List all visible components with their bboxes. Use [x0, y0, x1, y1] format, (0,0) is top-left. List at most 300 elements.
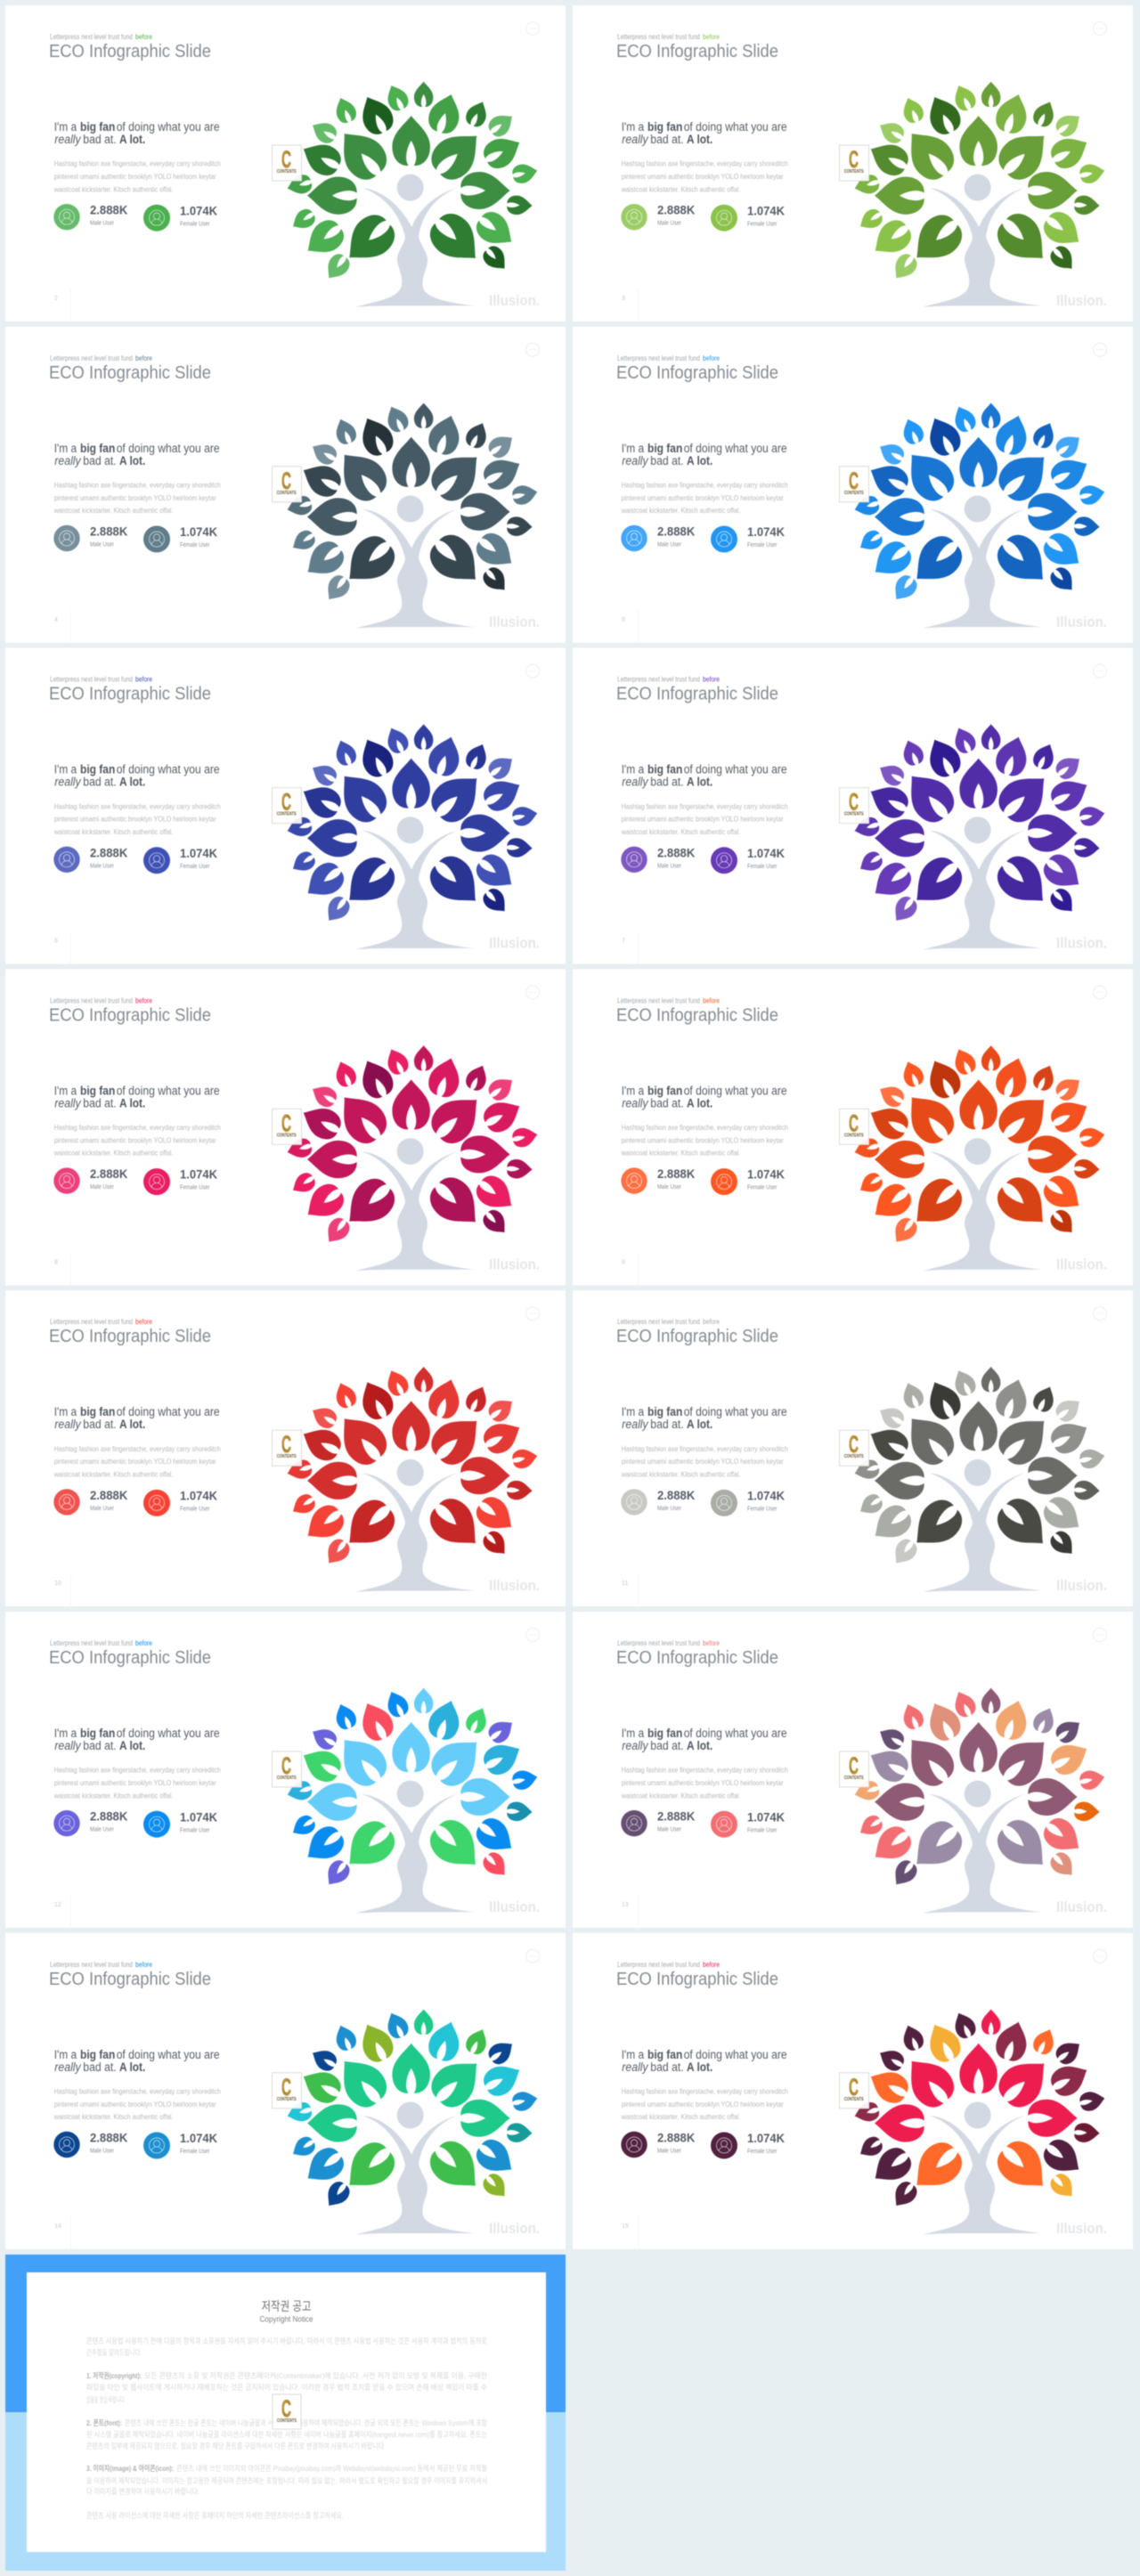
stat: male — [90, 1166, 127, 1190]
panel — [5, 969, 566, 1285]
brand: Illusion. — [489, 2220, 540, 2237]
quote: A lot. — [119, 1096, 145, 1109]
page number — [54, 611, 71, 643]
quote: bad at. — [650, 1096, 684, 1109]
quote: A lot. — [119, 1418, 145, 1431]
section 1: 모든 콘텐츠의 소유 및 저작권은 콘텐츠메이커(Contentmaker)에 있습니다. 사전 허가 없이 모방 및 복제를 이용, 구매한 — [144, 2371, 487, 2380]
slide 10: red — [5, 1290, 566, 1606]
page number — [622, 1253, 638, 1285]
body text — [53, 802, 221, 836]
icon: male user — [621, 1489, 647, 1516]
icon: menu — [525, 1628, 540, 1642]
eyebrow: Letterpress next level trust fund — [617, 1961, 700, 1969]
body text: waistcoat kickstarter. Kitsch authentic offal. — [621, 507, 740, 515]
badge — [273, 2394, 301, 2429]
badge: C — [849, 146, 859, 173]
eyebrow: Letterpress next level trust fund — [50, 676, 133, 684]
quote: really — [54, 454, 82, 467]
icon: menu — [1094, 664, 1106, 678]
stat: female: Female User — [747, 542, 778, 549]
badge — [273, 467, 301, 502]
quote — [54, 763, 220, 789]
brand: Illusion. — [489, 1255, 540, 1272]
quote — [622, 2048, 787, 2074]
stat: female — [747, 1167, 785, 1191]
tree — [285, 402, 539, 628]
stat: female: Female User — [747, 2149, 778, 2155]
eyebrow accent: before — [703, 1961, 720, 1969]
badge: C — [281, 789, 291, 816]
stat: male — [90, 1809, 127, 1833]
quote: bad at. — [83, 454, 117, 467]
quote: A lot. — [119, 1739, 145, 1752]
quote: I'm a — [622, 763, 645, 776]
stat: female: Female User — [747, 864, 778, 870]
badge: C — [849, 1752, 859, 1779]
stat: male: Male User — [657, 221, 682, 227]
body text: Hashtag fashion axe fingerstache, everyday carry shoreditch — [622, 1124, 788, 1132]
eyebrow: Letterpress next level trust fund — [617, 996, 700, 1004]
quote: A lot. — [687, 2060, 712, 2074]
body text — [621, 160, 788, 193]
badge: CONTENTS — [277, 2097, 297, 2102]
brand: Illusion. — [1056, 1255, 1107, 1272]
title: ECO Infographic Slide — [616, 1327, 778, 1346]
icon: female user — [711, 847, 737, 874]
title: ECO Infographic Slide — [616, 1005, 778, 1025]
stat: male: Male User — [90, 541, 115, 548]
page number: 2 — [54, 296, 58, 302]
eyebrow: Letterpress next level trust fund — [617, 1639, 700, 1647]
intro paragraph: 간주함을 알려드립니다. — [86, 2348, 142, 2357]
stat: male: Male User — [657, 2149, 682, 2155]
quote — [54, 1084, 220, 1109]
stat: female: Female User — [180, 221, 210, 227]
intro paragraph — [86, 2336, 487, 2357]
icon: female user — [711, 1490, 737, 1516]
slide 6: indigo — [5, 648, 566, 964]
body text — [621, 1767, 788, 1800]
body text: pinterest umami authentic brooklyn YOLO heirloom keytar — [622, 1136, 784, 1144]
stat: female — [180, 203, 217, 227]
quote: big fan — [647, 442, 682, 455]
icon: menu — [525, 1949, 540, 1962]
eyebrow: Letterpress next level trust fund — [617, 33, 700, 41]
quote: big fan — [647, 2048, 682, 2061]
stat: male — [657, 2130, 695, 2155]
stat: female: Female User — [747, 221, 778, 227]
eyebrow: Letterpress next level trust fund — [617, 1318, 700, 1326]
slide 13: mauve multicolour — [573, 1612, 1133, 1928]
badge — [273, 1751, 301, 1787]
page number: 11 — [622, 1581, 628, 1587]
icon: male user — [53, 204, 80, 230]
quote — [622, 120, 787, 146]
stat: female — [747, 1489, 785, 1512]
panel — [5, 327, 566, 643]
body text: Hashtag fashion axe fingerstache, everyday carry shoreditch — [622, 160, 788, 168]
stat: female: 1.074K — [180, 203, 217, 217]
icon: menu — [525, 664, 540, 678]
eyebrow: Letterpress next level trust fund — [50, 1961, 133, 1969]
quote: bad at. — [650, 1739, 684, 1752]
stat: male: Male User — [90, 863, 115, 869]
quote: bad at. — [83, 1418, 117, 1431]
quote: I'm a — [54, 763, 77, 776]
body text: Hashtag fashion axe fingerstache, everyday carry shoreditch — [54, 1767, 221, 1775]
badge — [839, 467, 869, 502]
stat: male: 2.888K — [657, 2131, 695, 2145]
page number — [54, 932, 71, 964]
brand: Illusion. — [1056, 292, 1107, 309]
slide 8: pink — [5, 969, 566, 1285]
quote — [54, 1727, 220, 1752]
tree — [285, 724, 539, 949]
body text — [621, 481, 788, 515]
body text: Hashtag fashion axe fingerstache, everyday carry shoreditch — [622, 1767, 788, 1775]
eyebrow: Letterpress next level trust fund — [50, 33, 133, 41]
stat: male: 2.888K — [657, 845, 695, 859]
body text — [53, 1124, 221, 1158]
quote: big fan — [647, 1405, 682, 1418]
slide 11: grey — [573, 1290, 1133, 1606]
stat: female: Female User — [180, 1827, 210, 1833]
icon: male user — [621, 1167, 647, 1194]
stat: male: Male User — [90, 221, 115, 227]
stat: female: Female User — [180, 864, 210, 870]
title: ECO Infographic Slide — [49, 685, 211, 704]
brand: Illusion. — [1056, 614, 1107, 630]
body text: pinterest umami authentic brooklyn YOLO heirloom keytar — [54, 1458, 216, 1466]
slide 9: orange — [573, 969, 1133, 1285]
stat: male: 2.888K — [657, 1166, 695, 1181]
title: ECO Infographic Slide — [49, 1648, 211, 1668]
section 1: 파일을 타인 및 웹사이트에 게시하거나 재배포하는 것은 금지되어 있습니다. 이러한 경우 법적 조치를 받을 수 있으며 손해 배상 책임이 따를 수 — [86, 2383, 487, 2392]
quote: really — [622, 776, 649, 789]
section 2: 콘텐츠 내에 쓰인 폰트는 한글 폰트는 네이버 나눔글꼴과 서울서체를 사용하여 제작되었습니다. 한글 외의 모든 폰트는 Windows System에 포함 — [125, 2418, 487, 2427]
slide 14: teal multicolour — [5, 1933, 566, 2249]
panel — [573, 969, 1133, 1285]
quote: of doing what you are — [684, 120, 787, 134]
quote: of doing what you are — [684, 1084, 787, 1097]
badge: C — [281, 467, 291, 494]
stat: female — [180, 2131, 217, 2155]
body text: waistcoat kickstarter. Kitsch authentic offal. — [621, 2113, 740, 2121]
section 1: 있음을 명심 바랍니다. — [86, 2395, 126, 2404]
eyebrow: Letterpress next level trust fund — [617, 676, 700, 684]
body text: waistcoat kickstarter. Kitsch authentic offal. — [53, 1150, 173, 1158]
stat: female: Female User — [180, 542, 210, 549]
quote: of doing what you are — [117, 1405, 220, 1418]
body text: pinterest umami authentic brooklyn YOLO heirloom keytar — [622, 2101, 784, 2109]
stat: male: Male User — [657, 1827, 682, 1833]
stat: male: 2.888K — [90, 1166, 127, 1181]
quote: of doing what you are — [117, 1084, 220, 1097]
page number: 3 — [622, 296, 625, 302]
badge: CONTENTS — [844, 1776, 864, 1781]
stat: male: Male User — [657, 1184, 682, 1190]
tree — [285, 1687, 539, 1914]
panel — [573, 1933, 1133, 2249]
eyebrow accent: before — [703, 1318, 720, 1326]
body text: pinterest umami authentic brooklyn YOLO heirloom keytar — [622, 1779, 784, 1787]
slide 2: green — [5, 5, 566, 321]
title: ECO Infographic Slide — [616, 1970, 778, 1989]
tree — [852, 2009, 1106, 2234]
page number: 6 — [54, 939, 58, 945]
quote: really — [54, 1739, 82, 1752]
stat: female: Female User — [180, 1185, 210, 1191]
body text: Hashtag fashion axe fingerstache, everyday carry shoreditch — [622, 481, 788, 489]
brand: Illusion. — [1056, 2220, 1107, 2237]
quote — [622, 763, 787, 789]
quote: bad at. — [650, 2060, 684, 2074]
stat: male — [90, 845, 127, 869]
slide 12: sky multicolour — [5, 1612, 566, 1928]
stat: male — [657, 1166, 695, 1190]
badge — [839, 1430, 869, 1466]
icon: menu — [525, 986, 540, 999]
tree — [285, 1367, 539, 1592]
stat: male: 2.888K — [90, 524, 127, 538]
section 3: 콘텐츠 내에 쓰인 이미지와 아이콘은 Pixabay(pixabay.com)와 Webdaysi(webdaysi.com) 등에서 제공된 무료 저작물 — [176, 2464, 487, 2473]
badge — [273, 1430, 301, 1466]
body text: waistcoat kickstarter. Kitsch authentic offal. — [621, 1470, 740, 1478]
section 2: 콘텐츠의 일부에 제공되지 않으므로, 필요할 경우 해당 폰트를 구입하셔서 다른 폰트로 변경하여 사용하시기 바랍니다. — [86, 2442, 386, 2450]
stat: male: Male User — [90, 2149, 115, 2155]
quote: of doing what you are — [684, 2048, 787, 2061]
quote: A lot. — [687, 133, 712, 146]
body text: waistcoat kickstarter. Kitsch authentic offal. — [53, 1470, 173, 1478]
stat: female: Female User — [180, 2149, 210, 2155]
quote: really — [54, 2060, 82, 2074]
body text: Hashtag fashion axe fingerstache, everyday carry shoreditch — [54, 2088, 221, 2096]
eyebrow accent: before — [135, 33, 152, 41]
quote: really — [622, 454, 649, 467]
badge — [273, 2073, 301, 2109]
brand: Illusion. — [1056, 1898, 1107, 1915]
stat: male: 2.888K — [657, 1488, 695, 1502]
icon: menu — [525, 1307, 540, 1321]
quote: big fan — [80, 2048, 115, 2061]
badge: C — [281, 2395, 291, 2422]
stat: female — [747, 524, 785, 549]
tree — [285, 2009, 539, 2234]
icon: female user — [143, 525, 170, 552]
stat: male: Male User — [657, 863, 682, 869]
eyebrow accent: before — [135, 354, 152, 362]
quote: bad at. — [650, 133, 684, 146]
icon: female user — [143, 205, 170, 232]
eyebrow accent: before — [135, 1639, 152, 1647]
stat: female: 1.074K — [180, 2131, 217, 2145]
stat: male: 2.888K — [90, 845, 127, 859]
stat: female: 1.074K — [747, 524, 785, 539]
quote: I'm a — [54, 2048, 77, 2061]
badge: CONTENTS — [277, 169, 297, 175]
stat: female: Female User — [180, 1506, 210, 1512]
panel — [5, 1290, 566, 1606]
brand: Illusion. — [489, 935, 540, 952]
body text: waistcoat kickstarter. Kitsch authentic offal. — [53, 828, 173, 836]
body text — [53, 481, 221, 515]
section 3 — [86, 2464, 487, 2496]
slide 5: blue — [573, 327, 1133, 643]
slide 3: light green — [573, 5, 1133, 321]
notice subtitle: Copyright Notice — [260, 2315, 314, 2324]
blue background top — [5, 2255, 566, 2412]
quote: I'm a — [622, 120, 645, 134]
stat: female — [180, 846, 217, 870]
icon: menu — [525, 21, 540, 36]
icon: male user — [53, 1489, 80, 1516]
badge: CONTENTS — [844, 1454, 864, 1459]
quote: really — [54, 1096, 82, 1109]
closing line: 콘텐츠 사용 라이선스에 대한 자세한 사항은 홈페이지 하단의 자세한 콘텐츠라이선스를 참고하세요. — [86, 2511, 344, 2520]
section 1: 1. 저작권(copyright): — [86, 2371, 142, 2380]
stat: male: 2.888K — [90, 1809, 127, 1824]
stat: male — [657, 845, 695, 869]
stat: female: 1.074K — [747, 1809, 785, 1824]
quote: I'm a — [54, 1405, 77, 1418]
page number: 8 — [54, 1259, 58, 1265]
badge — [839, 788, 869, 824]
body text: Hashtag fashion axe fingerstache, everyday carry shoreditch — [54, 481, 221, 489]
icon: menu — [1094, 986, 1106, 999]
icon: menu — [1094, 21, 1106, 36]
stat: male: 2.888K — [657, 1809, 695, 1824]
body text: waistcoat kickstarter. Kitsch authentic offal. — [53, 507, 173, 515]
body text: pinterest umami authentic brooklyn YOLO heirloom keytar — [622, 494, 784, 502]
icon: menu — [525, 343, 540, 356]
section 3: 3. 이미지(image) & 아이콘(icon): — [86, 2464, 174, 2473]
body text — [53, 1767, 221, 1800]
body text — [621, 1124, 788, 1158]
body text: waistcoat kickstarter. Kitsch authentic offal. — [53, 1792, 173, 1800]
body text: Hashtag fashion axe fingerstache, everyday carry shoreditch — [54, 1445, 221, 1453]
quote: bad at. — [83, 1096, 117, 1109]
quote: big fan — [80, 442, 115, 455]
quote: bad at. — [83, 776, 117, 789]
quote: I'm a — [622, 1727, 645, 1740]
panel — [573, 1290, 1133, 1606]
icon: male user — [621, 204, 647, 230]
eyebrow: Letterpress next level trust fund — [617, 354, 700, 362]
icon: menu — [1094, 1628, 1106, 1642]
icon: female user — [143, 847, 170, 874]
quote: A lot. — [119, 133, 145, 146]
quote: really — [622, 2060, 649, 2074]
body text: Hashtag fashion axe fingerstache, everyday carry shoreditch — [54, 160, 221, 168]
badge — [839, 1109, 869, 1144]
icon: menu — [1094, 1949, 1106, 1962]
badge: C — [849, 2074, 859, 2101]
stat: female: 1.074K — [180, 524, 217, 539]
icon: female user — [143, 1811, 170, 1838]
slide 4: slate — [5, 327, 566, 643]
title: ECO Infographic Slide — [616, 42, 778, 61]
body text: waistcoat kickstarter. Kitsch authentic offal. — [53, 185, 173, 193]
page number: 5 — [622, 617, 625, 623]
stat: female: 1.074K — [747, 1167, 785, 1182]
quote — [54, 2048, 220, 2074]
title: ECO Infographic Slide — [616, 1648, 778, 1668]
icon: male user — [53, 2132, 80, 2158]
page number: 13 — [622, 1902, 629, 1908]
quote: bad at. — [83, 2060, 117, 2074]
tree — [852, 81, 1106, 307]
body text — [53, 1445, 221, 1478]
eyebrow accent: before — [703, 676, 720, 684]
stat: female: 1.074K — [180, 1488, 217, 1502]
body text: Hashtag fashion axe fingerstache, everyday carry shoreditch — [622, 1445, 788, 1453]
quote: I'm a — [622, 2048, 645, 2061]
badge: CONTENTS — [277, 812, 297, 817]
stat: male — [90, 2130, 127, 2155]
panel — [5, 5, 566, 321]
icon: male user — [621, 847, 647, 873]
eyebrow: Letterpress next level trust fund — [50, 1318, 133, 1326]
quote: of doing what you are — [117, 2048, 220, 2061]
tree — [852, 1045, 1106, 1271]
brand: Illusion. — [1056, 935, 1107, 952]
icon: male user — [621, 1810, 647, 1836]
page number — [622, 611, 638, 643]
badge: C — [281, 1431, 291, 1458]
quote: A lot. — [687, 1739, 712, 1752]
quote: big fan — [80, 763, 115, 776]
stat: male — [657, 1488, 695, 1512]
title: ECO Infographic Slide — [49, 1327, 211, 1346]
icon: male user — [53, 525, 80, 551]
stat: female: 1.074K — [747, 2131, 785, 2145]
quote: I'm a — [54, 1084, 77, 1097]
stat: male: Male User — [90, 1827, 115, 1833]
tree — [852, 1687, 1106, 1914]
white card — [27, 2272, 546, 2552]
body text — [621, 2087, 788, 2121]
brand: Illusion. — [489, 1898, 540, 1915]
section 3: 다 이미지를 변경하여 사용하시기 바랍니다. — [86, 2487, 200, 2496]
quote: A lot. — [687, 454, 712, 467]
page number: 14 — [54, 2223, 61, 2230]
blue background bottom — [5, 2412, 566, 2571]
copyright notice panel — [5, 2255, 566, 2571]
icon: female user — [143, 1168, 170, 1195]
badge — [839, 145, 869, 181]
intro paragraph: 콘텐츠 사용법 사용하기 전에 다음의 항목과 소유권을 자세히 읽어 주시기 바랍니다. 따라서 이 콘텐츠 사용법 사용하는 것은 사용자 계약과 법적의 동의로 — [86, 2336, 487, 2345]
stat: female: Female User — [747, 1827, 778, 1833]
body text: waistcoat kickstarter. Kitsch authentic offal. — [621, 1792, 740, 1800]
body text: pinterest umami authentic brooklyn YOLO heirloom keytar — [54, 494, 216, 502]
quote: big fan — [647, 1727, 682, 1740]
section 3: 을 이용하여 제작되었습니다. 이미지는 참고용만 제공되며 콘텐츠에는 포함됩니다. 따라 필요 없는, 따라서 별도로 확인하고 필요할 경우 이미지를 유지하셔서 — [86, 2476, 487, 2485]
panel — [573, 648, 1133, 964]
icon: menu — [1094, 343, 1106, 356]
body text: pinterest umami authentic brooklyn YOLO heirloom keytar — [622, 1458, 784, 1466]
stat: male — [657, 203, 695, 227]
stat: male — [657, 524, 695, 549]
quote: really — [622, 133, 649, 146]
stat: male: Male User — [90, 1506, 115, 1512]
quote: I'm a — [54, 1727, 77, 1740]
panel — [5, 1612, 566, 1928]
quote: of doing what you are — [117, 120, 220, 134]
slide 15: crimson multicolour — [573, 1933, 1133, 2249]
badge: CONTENTS — [844, 491, 864, 496]
tree — [852, 724, 1106, 949]
title: ECO Infographic Slide — [49, 42, 211, 61]
